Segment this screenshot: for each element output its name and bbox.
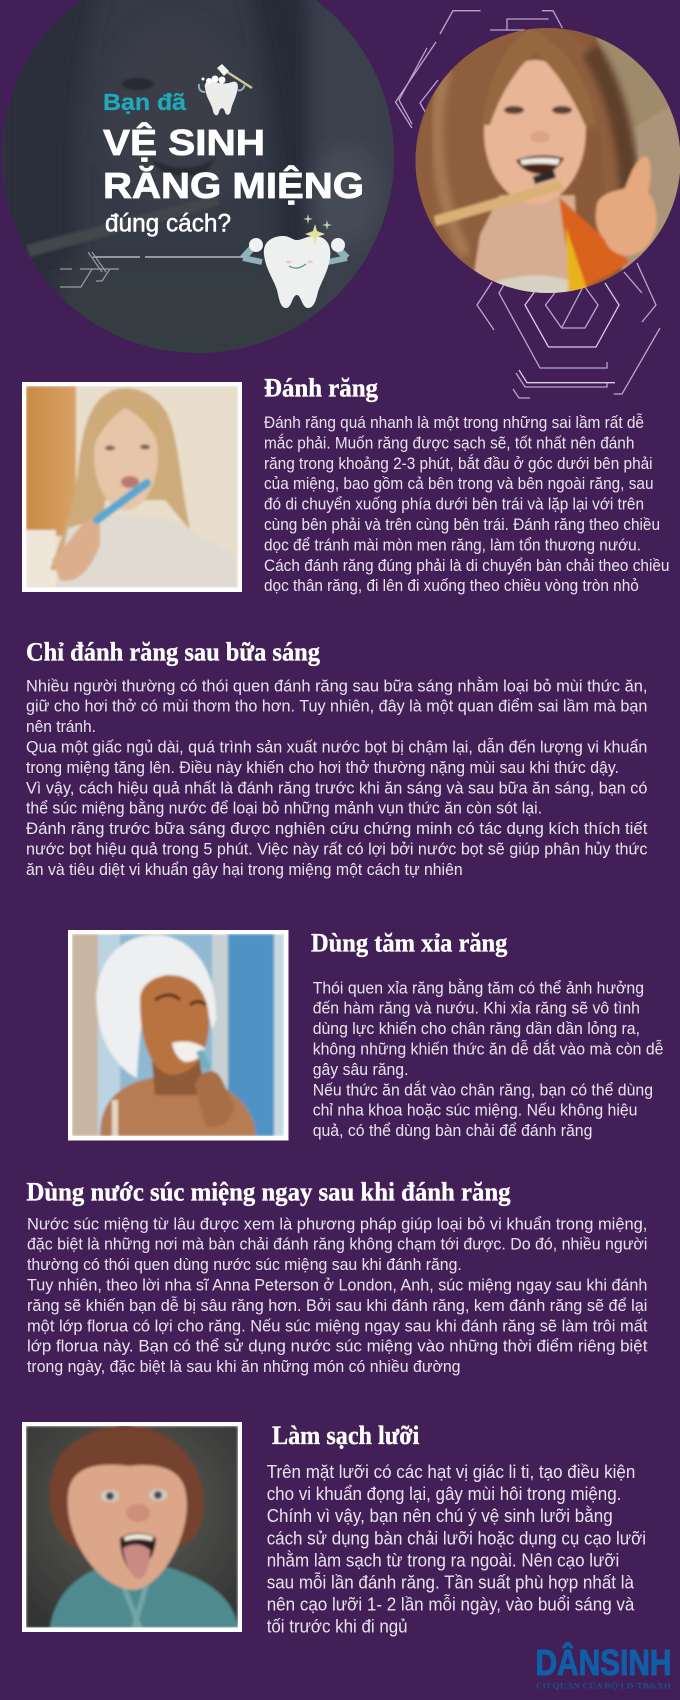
hero circle: darkened photo with title [0, 0, 400, 360]
photo circle: girl with bamboo toothbrush [410, 20, 680, 300]
mouth [516, 155, 564, 174]
heading: Dùng tăm xỉa răng: Dùng tăm xỉa răng [311, 929, 507, 958]
text block: mouthwash: Nước súc miệng từ lâu được xem là phương pháp giúp loại bỏ vi khuẩn trong miệng, [27, 1214, 647, 1233]
photo: child sticking out tongue [22, 1422, 242, 1632]
text block: mouthwash: lớp florua này. Bạn có thể sử dụng nước súc miệng vào những thời điểm riêng biệt [27, 1337, 648, 1356]
eyes and nose [504, 106, 524, 114]
text block: brushing: đó di chuyển xuống phía dưới bên trái và lặp lại với trên [264, 495, 644, 514]
text block: brushing: dọc thân răng, đi lên đi xuống theo chiều vòng tròn nhỏ [264, 576, 639, 595]
text block: breakfast: Nhiều người thường có thói quen đánh răng sau bữa sáng nhằm loại bỏ mùi thức ăn, [26, 676, 647, 695]
text block: tongue: Chính vì vậy, bạn nên chú ý vệ sinh lưỡi bằng [267, 1505, 613, 1526]
text block: tongue: Trên mặt lưỡi có các hạt vị giác li ti, tạo điều kiện [267, 1462, 635, 1482]
text block: toothpicks: chỉ nha khoa hoặc súc miệng. Nếu không hiệu [313, 1101, 638, 1120]
text block: mouthwash: trong ngày, đặc biệt là sau khi ăn những món có nhiều đường [27, 1357, 460, 1376]
text block: toothpicks: gây sâu răng. [313, 1060, 408, 1079]
text block: toothpicks [313, 978, 664, 1140]
dark photo background [0, 0, 400, 360]
title: Bạn đã: Bạn đã [103, 89, 186, 115]
heading: Chỉ đánh răng sau bữa sáng: Chỉ đánh răng sau bữa sáng [26, 638, 320, 667]
text block: breakfast: nên tránh. [26, 717, 96, 736]
decorative lines under the title [60, 252, 243, 287]
text block: toothpicks: dùng lực khiến cho chân răng dần dần lỏng ra, [313, 1019, 640, 1038]
text block: breakfast: giữ cho hơi thở có mùi thơm tho hơn. Tuy nhiên, đây là một quan điểm sai lầm mà bạn [26, 697, 647, 716]
icon: tooth with toothbrush [199, 64, 252, 115]
text block: brushing [264, 413, 670, 595]
text block: mouthwash: một lớp florua có lợi cho răng. Nếu súc miệng ngay sau khi đánh răng sẽ làm trôi mất [27, 1316, 648, 1335]
text block: breakfast: Qua một giấc ngủ dài, quá trình sản xuất nước bọt bị chậm lại, dẫn đến lượng vi khuẩn [26, 738, 647, 756]
text block: tongue: nên cạo lưỡi 1- 2 lần mỗi ngày, vào buổi sáng và [267, 1594, 635, 1615]
text block: mouthwash: răng sẽ khiến bạn dễ bị sâu răng hơn. Bởi sau khi đánh răng, kem đánh răng sẽ để lại [27, 1296, 647, 1315]
text block: tongue [267, 1462, 646, 1637]
photo: woman with towel cleaning teeth [68, 930, 288, 1140]
photo: girl brushing teeth [22, 382, 242, 592]
text block: breakfast: trong miệng tăng lên. Điều này khiến cho hơi thở thường nặng mùi sau khi thức dậy. [26, 758, 619, 777]
text block: brushing: mắc phải. Muốn răng được sạch sẽ, tốt nhất nên đánh [264, 433, 634, 452]
panel: mouthwash right after brushing [26, 1178, 648, 1376]
text block: toothpicks: Thói quen xỉa răng bằng tăm có thể ảnh hưởng [313, 978, 644, 997]
thumb and hand [595, 156, 657, 256]
title: VỆ SINH: VỆ SINH [103, 121, 265, 163]
text block: brushing: dọc để tránh mài mòn men răng, làm tổn thương nướu. [264, 535, 641, 554]
toothbrush [434, 180, 563, 226]
logo: Dân Sinh: CƠ QUAN CỦA BỘ LĐ-TB&XH [536, 1680, 671, 1690]
text block: mouthwash: đặc biệt là những nơi mà bàn chải đánh răng không chạm tới được. Do đó, nhiều người [27, 1235, 647, 1254]
panel: cleaning the tongue [22, 1421, 646, 1637]
text block: breakfast: ăn và tiêu diệt vi khuẩn gây hại trong miệng một cách tự nhiên [26, 860, 463, 879]
panel: brushing teeth [22, 374, 670, 595]
text block: mouthwash [27, 1214, 648, 1376]
text block: breakfast: thể súc miệng bằng nước để loại bỏ những mảnh vụn thức ăn còn sót lại. [26, 799, 542, 818]
text block: mouthwash: thường có thói quen dùng nước súc miệng sau khi đánh răng. [27, 1255, 462, 1274]
text block: toothpicks: không những khiến thức ăn dễ dắt vào mà còn dễ [313, 1040, 664, 1058]
text block: toothpicks: đến hàm răng và nướu. Khi xỉa răng sẽ vô tình [313, 999, 640, 1018]
text block: toothpicks: Nếu thức ăn dắt vào chân răng, bạn có thể dùng [313, 1080, 653, 1099]
text block: tongue: nhằm làm sạch từ trong ra ngoài. Nên cạo lưỡi [267, 1549, 619, 1570]
text block: breakfast: Vì vậy, cách hiệu quả nhất là đánh răng trước khi ăn sáng và sau bữa ăn sáng, bạn có [26, 778, 647, 797]
hair sides [416, 28, 614, 271]
text block: breakfast: Đánh răng trước bữa sáng được nghiên cứu chứng minh có tác dụng kích thích tiết [26, 819, 648, 838]
panel: using toothpicks [68, 929, 664, 1140]
text block: toothpicks: quả, có thể dùng bàn chải để đánh răng [313, 1121, 592, 1140]
towel [559, 197, 630, 292]
title: đúng cách?: đúng cách? [105, 210, 231, 238]
heading: Dùng nước súc miệng ngay sau khi đánh răng: Dùng nước súc miệng ngay sau khi đánh răng [26, 1178, 510, 1207]
text block: tongue: cho vi khuẩn đọng lại, gây mùi hôi trong miệng. [267, 1484, 621, 1504]
neck and chest [473, 194, 578, 292]
text block: tongue: tối trước khi đi ngủ [267, 1617, 408, 1637]
face [484, 60, 586, 204]
text block: brushing: Đánh răng quá nhanh là một trong những sai lầm rất dễ [264, 413, 644, 432]
text block: breakfast: nước bọt hiệu quả trong 5 phút. Việc này rất có lợi bởi nước bọt sẽ giúp phân hủy thức [26, 840, 648, 858]
heading: Đánh răng: Đánh răng [264, 374, 378, 403]
heading: Làm sạch lưỡi: Làm sạch lưỡi [272, 1421, 419, 1450]
decorative hexagon line art [396, 11, 660, 398]
panel: brushing only after breakfast [26, 638, 648, 879]
text block: mouthwash: Tuy nhiên, theo lời nha sĩ Anna Peterson ở London, Anh, súc miệng ngay sau khi đánh [27, 1276, 647, 1294]
text block: tongue: sau mỗi lần đánh răng. Tần suất phù hợp nhất là [267, 1572, 635, 1592]
icon: strong smiling tooth with sparkle [243, 214, 347, 308]
text block: tongue: cách sử dụng bàn chải lưỡi hoặc dụng cụ cạo lưỡi [267, 1528, 646, 1548]
text block: breakfast [26, 676, 648, 879]
title: RĂNG MIỆNG: RĂNG MIỆNG [103, 164, 364, 206]
